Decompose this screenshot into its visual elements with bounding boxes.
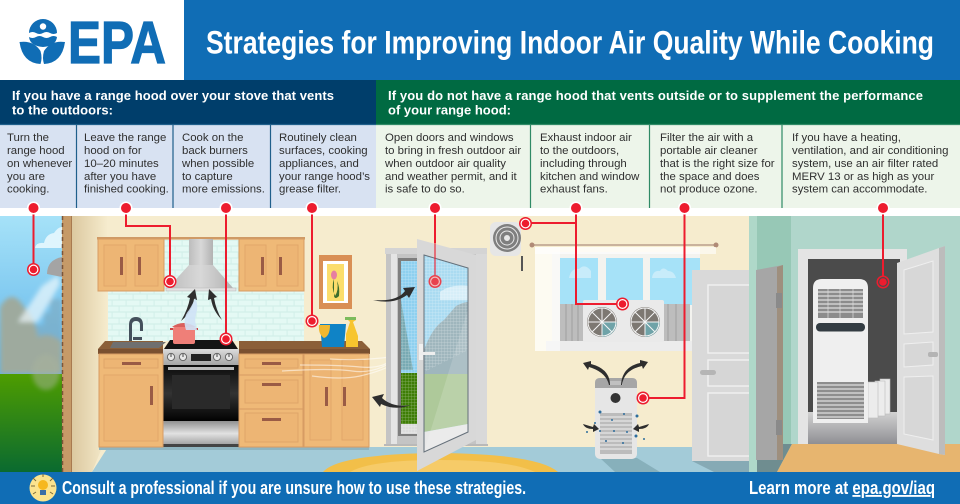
window with curtains: [530, 242, 718, 351]
strategy: HVAC filter: system can accommodate.: [792, 184, 927, 196]
logo wordmark: EPA: [68, 10, 166, 76]
upper right cabinet: [239, 239, 304, 291]
floor: [92, 447, 960, 472]
strategy: HVAC filter: If you have a heating,: [792, 132, 901, 144]
spare filters: [868, 379, 890, 418]
strategy: open doors: Open doors and windows: [385, 132, 514, 144]
panel: no range hood heading: If you do not have a range hood that vents outside or to supplement the performance: [388, 88, 923, 103]
HVAC unit: [813, 279, 868, 423]
strategy: HVAC filter: ventilation, and air conditioning: [792, 145, 948, 157]
panel: range hood heading: to the outdoors:: [12, 102, 113, 118]
strategy: filter air: that is the right size for: [660, 158, 775, 170]
panel: no range hood heading: [376, 80, 960, 124]
strategy: filter air: portable air cleaner: [660, 145, 758, 157]
pin: open doors: [428, 202, 442, 288]
arrows: air to hood: [181, 289, 222, 321]
pin: turn on hood: [27, 202, 40, 276]
strategy: turn on hood: range hood: [7, 145, 65, 157]
arrows: air cleaner flow: [583, 360, 649, 432]
exhaust vent: [47, 257, 62, 277]
air cleaner: [583, 360, 660, 472]
callout lines and pins: [27, 202, 890, 404]
pin: leave hood on: [120, 202, 176, 288]
illustration: room scene: [0, 216, 960, 472]
strategy: leave hood on: 10–20 minutes: [84, 158, 159, 170]
strategy: exhaust air: to the outdoors,: [540, 145, 619, 157]
airflow wisps: [282, 357, 390, 378]
upper left cabinet: [97, 237, 305, 291]
strategy: back burners: more emissions.: [182, 184, 265, 196]
strategy: open doors: is safe to do so.: [385, 184, 465, 196]
icon: light bulb: [30, 474, 56, 502]
lower right cabinet: [304, 354, 369, 447]
footer note: Consult a professional if you are unsure how to use these strategies.: [62, 477, 526, 498]
door opening frame: [384, 248, 488, 446]
window exhaust fan: [583, 300, 664, 342]
strategy: turn on hood: Turn the: [7, 132, 49, 144]
sink and faucet: [129, 317, 143, 341]
cleaning supplies: [319, 317, 358, 347]
interior door: [692, 270, 752, 472]
panel: range hood heading: If you have a range hood over your stove that vents: [12, 88, 334, 103]
strategy: leave hood on: Leave the range: [84, 132, 166, 144]
strategy: open doors: to bring in fresh outdoor air: [385, 145, 521, 157]
arrows: door airflow: [372, 287, 415, 408]
panel: other strategies: [376, 124, 960, 209]
strategy: clean surfaces: Routinely clean: [279, 132, 357, 144]
strategy: turn on hood: cooking.: [7, 184, 49, 196]
strategy: back burners: when possible: [181, 158, 254, 170]
footer link: Learn more at epa.gov/iaq: [749, 477, 935, 498]
strategy: open doors: and weather permit, and it: [385, 171, 518, 183]
closet door: [897, 246, 945, 455]
open glass door: [417, 239, 476, 471]
wall: [62, 216, 762, 472]
panel: range hood heading: [0, 80, 376, 124]
pin: clean surfaces: [306, 202, 318, 328]
wall exhaust fan: [490, 222, 523, 271]
icon: EPA flower: [20, 19, 65, 64]
wall cut edge: [62, 216, 72, 472]
strategy: leave hood on: hood on for: [84, 145, 142, 157]
pin: HVAC filter: [876, 202, 890, 288]
title banner: [184, 0, 960, 80]
strategy: leave hood on: finished cooking.: [84, 184, 169, 196]
steam: [185, 298, 197, 330]
strategy: filter air: Filter the air with a: [660, 132, 754, 144]
panel: no range hood heading: of your range hood:: [388, 102, 511, 118]
rug: [323, 453, 558, 472]
strategy: filter air: the space and does: [660, 171, 760, 183]
pin: back burners: [220, 202, 232, 346]
picture: [319, 255, 352, 309]
pot: [170, 323, 198, 344]
strategy: exhaust air: Exhaust indoor air: [540, 132, 632, 144]
strategy: HVAC filter: system, use an air filter rated: [792, 158, 938, 170]
strategy: exhaust air: including through: [540, 158, 627, 170]
panel: range hood strategies: [0, 124, 376, 209]
strategy: open doors: when outdoor air quality: [384, 158, 506, 170]
header logo panel: [0, 0, 184, 80]
lower left cabinet: [99, 354, 163, 447]
strategy: clean surfaces: your range hood’s: [279, 171, 370, 183]
strategy: filter air: not produce ozone.: [660, 184, 758, 196]
counter: [98, 341, 370, 354]
strategy: clean surfaces: surfaces, cooking: [279, 145, 368, 157]
white gap above scene: [0, 208, 960, 216]
strategy: clean surfaces: grease filter.: [279, 184, 341, 196]
pin: exhaust fans: [519, 202, 629, 310]
closet frame: [798, 249, 907, 444]
strategy: turn on hood: you are: [7, 171, 45, 183]
strategy: clean surfaces: appliances, and: [279, 158, 359, 170]
strategy: back burners: Cook on the: [182, 132, 243, 144]
footer bar: [0, 472, 960, 504]
strategy: back burners: to capture: [182, 171, 233, 183]
teal wall section: [749, 216, 960, 472]
backsplash: [108, 240, 304, 341]
strategy: turn on hood: on whenever: [7, 158, 72, 170]
strategy: exhaust air: exhaust fans.: [540, 184, 608, 196]
strategy: leave hood on: after you have: [84, 171, 156, 183]
outdoor view: [0, 216, 62, 472]
strategy: exhaust air: kitchen and window: [540, 171, 640, 183]
pin: air cleaner: [636, 202, 691, 404]
closet floor mat: [777, 444, 960, 472]
strategy: HVAC filter: MERV 13 or as high as your: [792, 171, 934, 183]
range hood: [166, 239, 236, 291]
lower middle drawers: [239, 354, 303, 447]
stove: [163, 340, 239, 447]
strategy: back burners: back burners: [182, 145, 248, 157]
side wall: [72, 216, 108, 472]
